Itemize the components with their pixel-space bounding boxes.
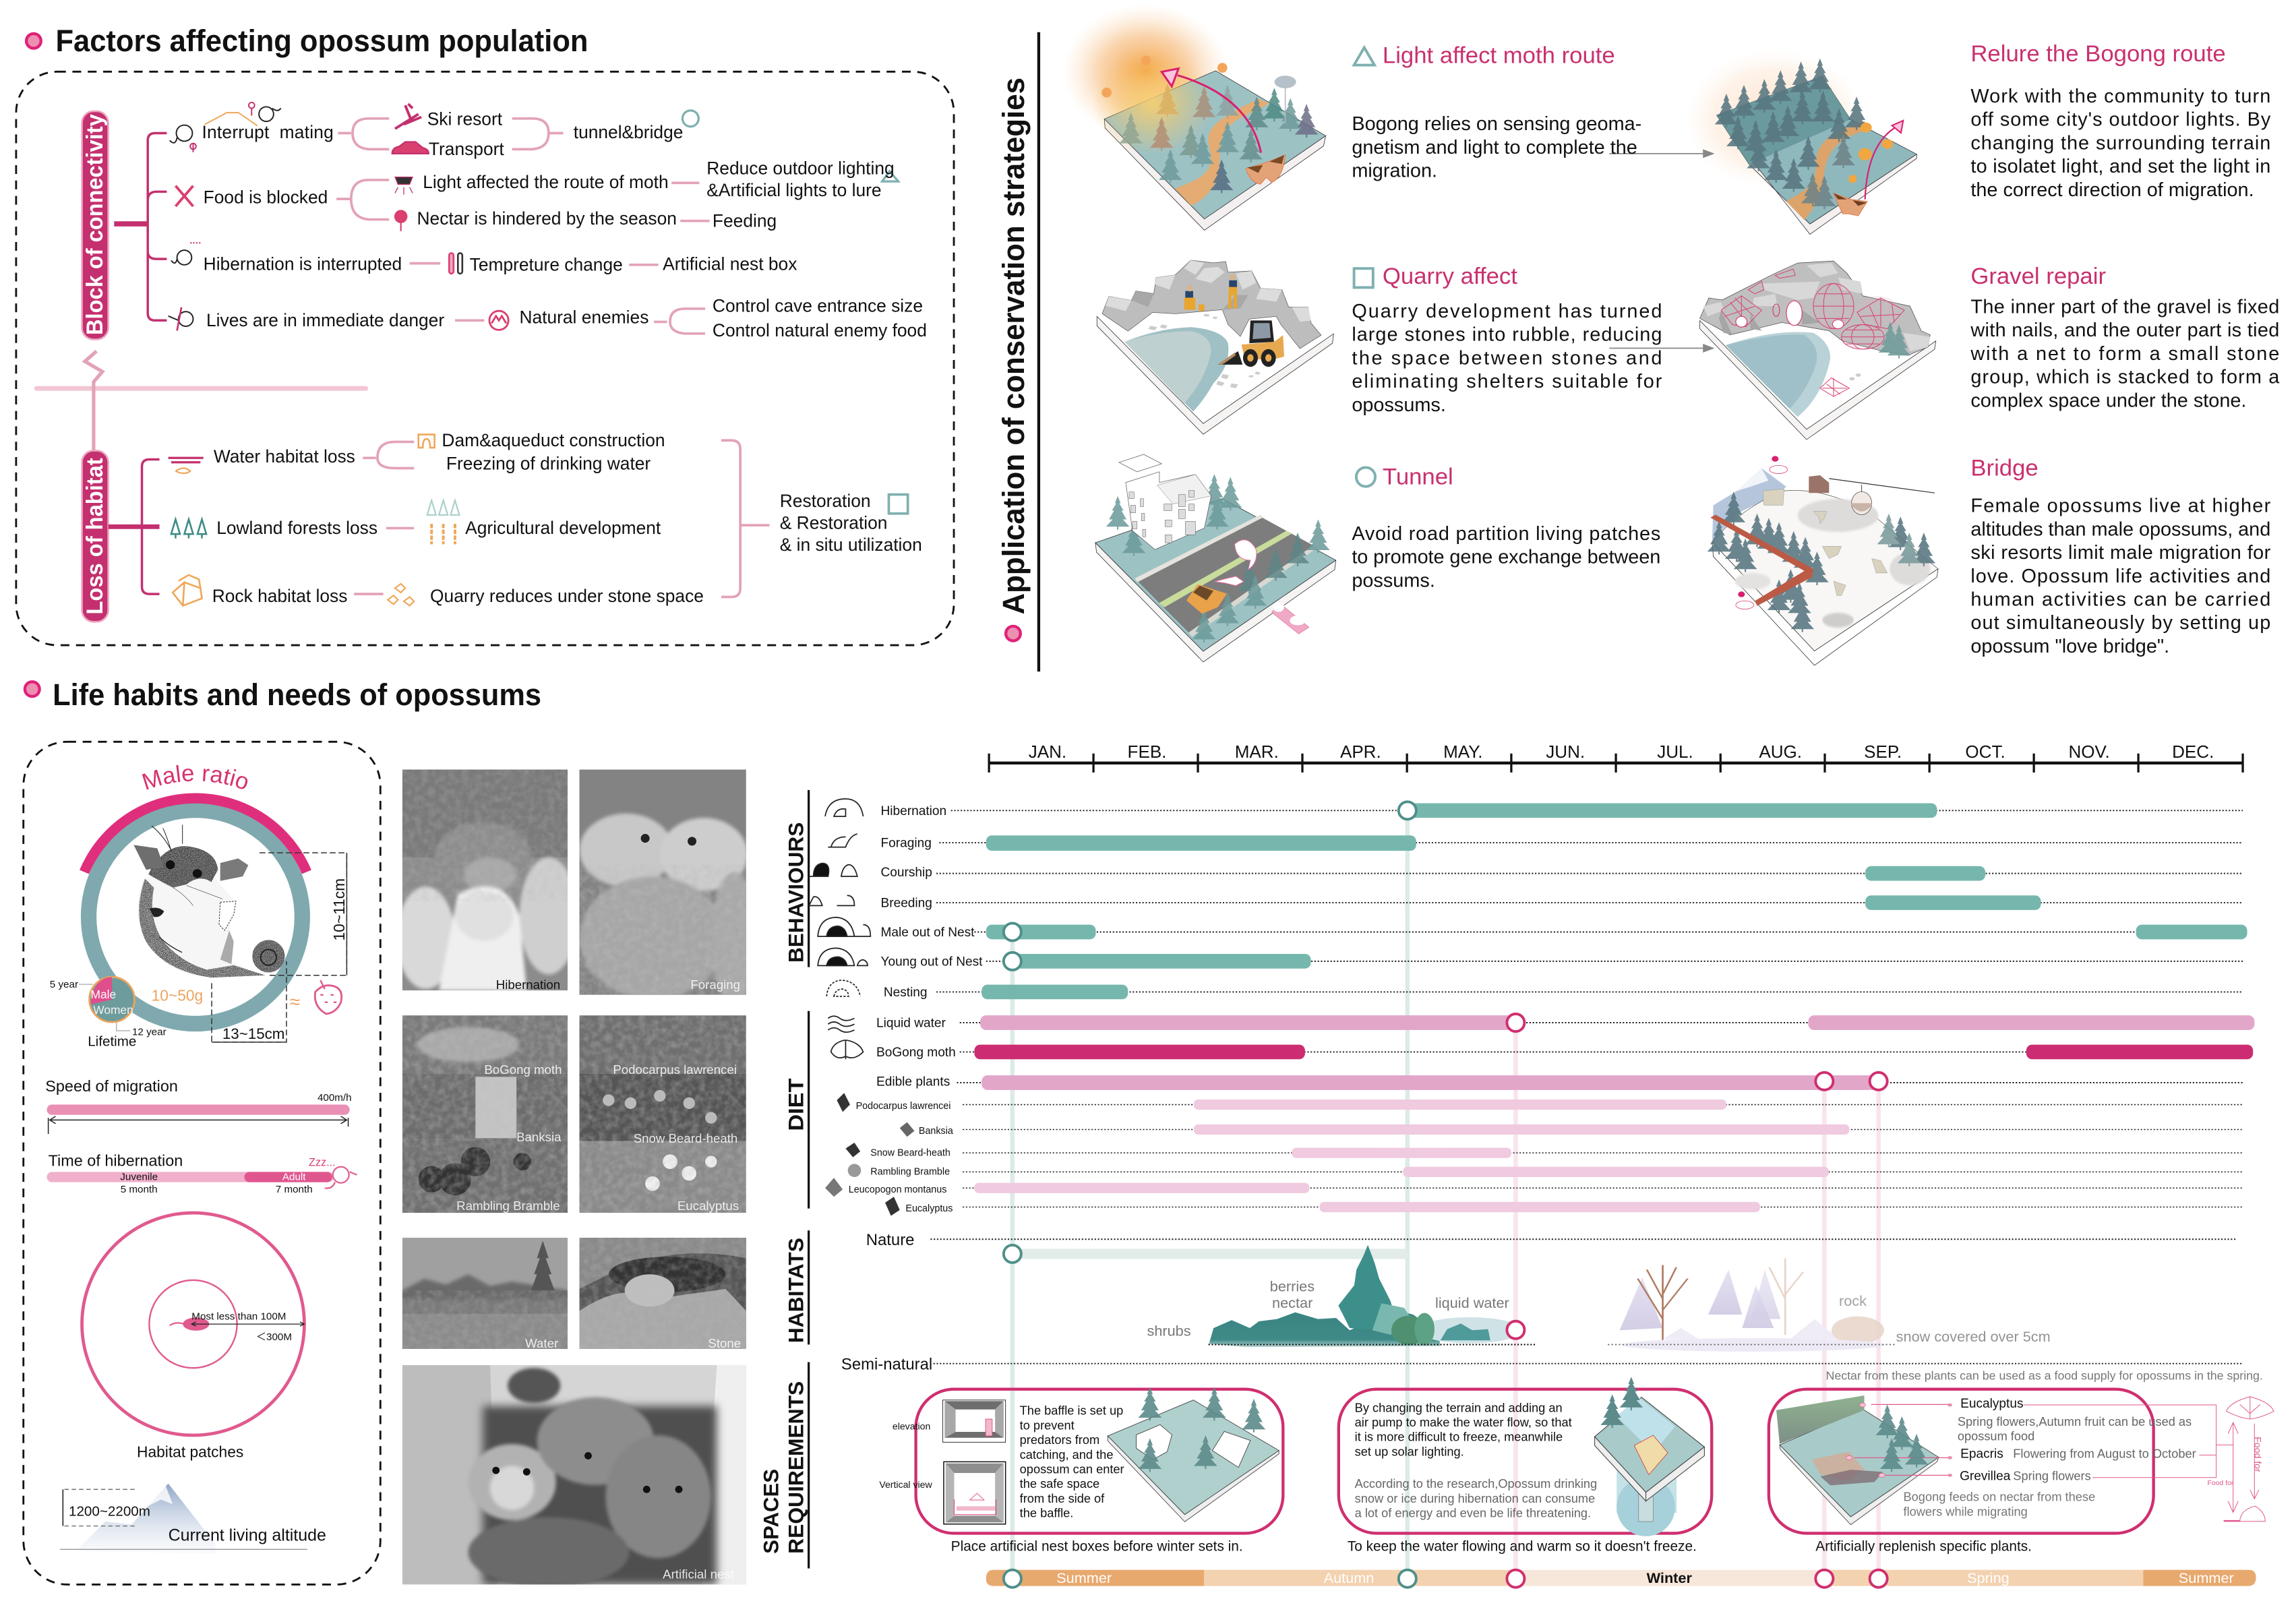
chart: time of hibernation: Time of hibernation [49, 1152, 183, 1170]
axis: months: DEC. [2172, 742, 2214, 762]
row labels: behaviours and diet: Banksia [919, 1126, 953, 1137]
text block: quarry affect: Quarry affect [1383, 264, 1517, 289]
text block: light affect moth route: migration. [1352, 160, 1437, 182]
chart: time of hibernation: 7 month [276, 1184, 313, 1195]
text block: bridge: opossum "love bridge". [1970, 636, 2169, 657]
diagram: moth feeds possum food chain: Food for [2208, 1480, 2234, 1487]
axis: months: JUL. [1657, 742, 1693, 762]
text block: tunnel: to promote gene exchange between [1352, 547, 1660, 568]
vertical rule [1037, 32, 1040, 671]
text block: bridge: altitudes than male opossums, and [1970, 518, 2270, 540]
photo: plants right column: Podocarpus lawrencei [613, 1062, 737, 1077]
text block: light affect moth route: gnetism and light to complete the [1352, 137, 1637, 158]
panel: replenish plants: flowers while migrating [1904, 1504, 2028, 1518]
text block: tunnel: Avoid road partition living patches [1352, 523, 1660, 545]
axis: months: SEP. [1864, 742, 1902, 762]
note: nectar: Nectar from these plants can be used as a food supply for opossums in the spring. [1826, 1369, 2263, 1383]
chart: speed of migration [45, 1077, 352, 1134]
timeline markers [1004, 802, 1888, 1588]
section: application of conservation strategies [996, 5, 2280, 671]
icon: approx strawberry: ≈ [290, 990, 300, 1012]
icon: rock cubes [173, 575, 202, 605]
panel: artificial nest boxes: the baffle. [1020, 1506, 1073, 1520]
panel: replenish plants: Spring flowers [2013, 1469, 2091, 1483]
illustration: natural habitat vegetation: liquid water [1435, 1294, 1509, 1311]
row labels: behaviours and diet: Leucopogon montanus [849, 1184, 946, 1195]
chart: diet [974, 1015, 2254, 1212]
panel: replenish plants: Bogong feeds on nectar from these [1904, 1490, 2095, 1504]
captions [951, 1538, 2032, 1554]
text block: light affect moth route [1352, 42, 1641, 182]
text block: tunnel: possums. [1352, 570, 1435, 591]
panel: replenish plants: opossum food [1958, 1429, 2034, 1443]
panel: artificial nest boxes: the safe space [1020, 1476, 1099, 1491]
factor labels: Freezing of drinking water [446, 454, 651, 474]
group labels: SPACES [760, 1469, 783, 1554]
factor labels: Quarry reduces under stone space [430, 586, 704, 606]
factor labels: Transport [429, 139, 504, 159]
panel: artificial nest boxes: from the side of [1020, 1491, 1105, 1505]
pill: block of connectivity: Block of connectivity [82, 114, 108, 335]
illustration: snow-covered forest: snow covered over 5cm [1896, 1328, 2051, 1345]
group labels: HABITATS [784, 1238, 808, 1343]
panel: artificial nest boxes: to prevent [1020, 1418, 1075, 1432]
chart: season bar [986, 1569, 2256, 1586]
icon: predator cat [489, 311, 508, 330]
illustration: opossum [133, 824, 284, 978]
group labels: BEHAVIOURS [784, 822, 808, 963]
illustration: tunnel road [1095, 454, 1336, 662]
panel: keep water flowing: air pump to make the water flow, so that [1355, 1415, 1572, 1429]
diagram: moth feeds possum food chain [2208, 1397, 2274, 1522]
photo: stone: Stone [708, 1336, 741, 1350]
chart: behaviours [982, 803, 2247, 999]
dimension: body height: 10~11cm [330, 878, 348, 940]
illustration: natural habitat vegetation [1147, 1245, 1536, 1347]
icon: thermometer [449, 253, 462, 274]
chart: lifetime pie: 5 year [50, 979, 78, 990]
icons: behaviour rows [809, 799, 870, 1059]
illustration: altitude mountain [60, 1484, 326, 1554]
photo: plants left column: BoGong moth [484, 1062, 562, 1077]
icons: plant species [825, 1093, 914, 1215]
panel: artificial nest boxes: elevation [893, 1420, 930, 1431]
panel: keep water flowing: snow or ice during hibernation can consume [1355, 1491, 1595, 1505]
icon: dam [419, 435, 435, 448]
section: life habits and needs [22, 678, 746, 1586]
panel: artificial nest boxes: Vertical view [879, 1479, 932, 1490]
icon: car [392, 142, 429, 154]
section heading marker [25, 682, 40, 696]
arrow: light to relure [1609, 149, 1715, 158]
row labels: behaviours and diet: BoGong moth [876, 1046, 956, 1060]
factor labels: tunnel&bridge [574, 122, 683, 142]
chart: lifetime pie: Women [93, 1003, 133, 1017]
photo: water [402, 1238, 568, 1350]
chart: season bar: Spring [1967, 1569, 2010, 1586]
axis: months: MAR. [1235, 742, 1279, 762]
connector between groups [36, 351, 366, 454]
panel: replenish plants [1769, 1389, 2233, 1533]
text block: bridge: love. Opossum life activities and [1970, 566, 2270, 587]
icon: farmland [427, 500, 459, 544]
factor labels: Food is blocked [204, 187, 328, 208]
factor labels [202, 109, 927, 606]
axis: months: APR. [1340, 742, 1381, 762]
row labels: behaviours and diet: Courship [881, 866, 932, 880]
text block: relure the bogong route: the correct direction of migration. [1970, 179, 2254, 201]
chart: habitat patches [82, 1213, 304, 1461]
group labels: DIET [784, 1078, 808, 1131]
text block: bridge: ski resorts limit male migration for [1970, 542, 2271, 564]
branch: connectivity tree [114, 133, 167, 320]
text block: quarry affect: the space between stones and [1352, 347, 1662, 369]
panel: keep water flowing: a lot of energy and even be life threatening. [1355, 1506, 1591, 1520]
title: factors: Factors affecting opossum population [55, 24, 588, 58]
panel: replenish plants: Spring flowers,Autumn fruit can be used as [1958, 1414, 2192, 1428]
chart: habitat patches: Most less than 100M [191, 1311, 286, 1323]
chart: lifetime pie: Lifetime [88, 1034, 136, 1050]
illustration: relure the bogong route [1685, 49, 1916, 235]
factor labels: Lives are in immediate danger [206, 310, 444, 330]
panel: replenish plants: Eucalyptus [1960, 1397, 2023, 1411]
photo: plants right column: Eucalyptus [677, 1199, 739, 1213]
row labels: behaviours and diet: Foraging [881, 837, 932, 851]
row labels: behaviours and diet: Eucalyptus [905, 1203, 953, 1214]
chart: season bar: Summer [1056, 1569, 1112, 1586]
text block: bridge: Bridge [1970, 455, 2039, 481]
chart: lifetime pie: Male [91, 988, 116, 1001]
illustration: altitude mountain: 1200~2200m [69, 1503, 150, 1519]
factor labels: Artificial nest box [663, 253, 797, 274]
illustration: natural habitat vegetation: shrubs [1147, 1322, 1191, 1339]
chart: season bar: Autumn [1324, 1569, 1374, 1586]
trees on gravel scene [1879, 322, 1910, 359]
panel: artificial nest boxes: catching, and the [1020, 1447, 1113, 1462]
row labels: behaviours and diet: Hibernation [881, 804, 946, 818]
chart: time of hibernation: Juvenile [120, 1171, 158, 1182]
diagram: moth feeds possum food chain: Food for [2252, 1437, 2263, 1472]
illustration: altitude mountain: Current living altitude [169, 1526, 326, 1544]
weight label: 10~50g [152, 986, 203, 1004]
guide lines and connector bands [1013, 810, 1879, 1579]
dimension: body height [260, 853, 348, 975]
row labels: behaviours and diet: Young out of Nest [881, 955, 983, 969]
row labels: behaviours and diet: Liquid water [876, 1017, 946, 1031]
captions: Place artificial nest boxes before winter sets in. [951, 1538, 1243, 1554]
photo: water: Water [525, 1336, 558, 1350]
text block: gravel repair: with nails, and the outer part is tied [1970, 320, 2279, 341]
axis: months: OCT. [1965, 742, 2005, 762]
axis: months: NOV. [2069, 742, 2110, 762]
row labels: behaviours and diet: Breeding [881, 897, 932, 911]
text block: gravel repair: group, which is stacked to form a [1970, 367, 2280, 388]
icon: fork and knife [175, 186, 193, 206]
pill: loss of habitat: Loss of habitat [82, 458, 108, 615]
panel: keep water flowing: By changing the terrain and adding an [1355, 1400, 1563, 1414]
text block: bridge: human activities can be carried [1970, 589, 2270, 610]
text block: relure the bogong route: changing the surrounding terrain [1970, 132, 2270, 154]
habitat labels: Nature [866, 1231, 914, 1249]
row labels: behaviours and diet: Nesting [884, 986, 928, 1000]
row labels: behaviours and diet [849, 804, 983, 1214]
factor labels: Nectar is hindered by the season [417, 208, 677, 229]
panel: artificial nest boxes: opossum can enter [1020, 1462, 1124, 1476]
text block: relure the bogong route: Work with the community to turn [1970, 86, 2270, 107]
section: annual timeline chart [760, 742, 2274, 1588]
axis: months: JAN. [1029, 742, 1066, 762]
text block: bridge: out simultaneously by setting up [1970, 612, 2270, 634]
text block: gravel repair [1970, 264, 2280, 411]
icon: opossum mating [170, 102, 281, 152]
factor labels: Control natural enemy food [713, 320, 927, 340]
text block: relure the bogong route [1970, 41, 2271, 201]
row labels: behaviours and diet: Male out of Nest [881, 926, 975, 940]
chart: habitat patches: Habitat patches [137, 1443, 243, 1461]
panel: replenish plants: Flowering from August to October [2013, 1447, 2196, 1461]
icon: restoration square [888, 495, 908, 514]
axis: months: JUN. [1546, 742, 1585, 762]
text block: relure the bogong route: off some city's outdoor lights. By [1970, 109, 2271, 131]
title: life habits: Life habits and needs of opossums [53, 678, 541, 712]
text block: gravel repair: with a net to form a small stone [1970, 343, 2279, 365]
chart: season bar: Summer [2179, 1569, 2234, 1586]
icon: water and fish [169, 458, 204, 473]
factor labels: & Restoration [780, 513, 887, 533]
panel: opossum profile dashed frame [24, 742, 380, 1584]
factor labels: Tempreture change [470, 255, 623, 275]
section: factors affecting opossum population [16, 24, 954, 645]
illustration: love bridge ski resort [1708, 456, 1938, 665]
axis: months: MAY. [1443, 742, 1482, 762]
text block: light affect moth route: Bogong relies on sensing geoma- [1352, 113, 1641, 135]
row labels: behaviours and diet: Rambling Bramble [870, 1167, 950, 1178]
factor labels: Ski resort [427, 109, 503, 129]
icon: lowland trees [171, 519, 206, 539]
text block: quarry affect: large stones into rubble, reducing [1352, 324, 1662, 346]
habitat labels: Semi-natural [841, 1355, 932, 1373]
panel: factors dashed frame [16, 71, 954, 645]
photo: foraging [579, 770, 746, 995]
panel: artificial nest boxes: predators from [1020, 1433, 1099, 1447]
text block: gravel repair: The inner part of the gravel is fixed [1970, 296, 2279, 318]
arrow: quarry to gravel [1609, 344, 1715, 353]
text block: relure the bogong route: to isolatet light, and set the light in [1970, 156, 2270, 177]
row labels: behaviours and diet: Edible plants [876, 1075, 950, 1089]
pink connector brackets [336, 119, 770, 597]
photo: plants left column: Banksia [516, 1130, 562, 1144]
illustration: snow-covered forest: rock [1839, 1292, 1867, 1309]
axis: months: AUG. [1759, 742, 1802, 762]
icon: lamp [395, 177, 413, 195]
factor labels: Light affected the route of moth [423, 172, 669, 192]
illustration: snow-covered forest [1608, 1259, 2051, 1352]
panel: keep water flowing [1339, 1377, 1712, 1536]
icon: hibernating opossum [171, 243, 200, 265]
factor labels: Control cave entrance size [713, 295, 923, 315]
chart: time of hibernation: Adult [282, 1171, 306, 1182]
chart: habitat patches: ＜300M [256, 1331, 292, 1343]
chart: time of hibernation: 5 month [121, 1184, 158, 1195]
factor labels: Restoration [780, 491, 871, 511]
chart: male ratio ring [80, 764, 311, 1031]
dimension: body width: 13~15cm [222, 1025, 284, 1042]
group labels [760, 790, 810, 1569]
factor labels: Feeding [713, 210, 777, 231]
row labels: behaviours and diet: Podocarpus lawrencei [856, 1101, 950, 1112]
text block: quarry affect: opossums. [1352, 394, 1446, 416]
photo: artificial nest: Artificial nest [663, 1567, 735, 1582]
illustration: gravel repair [1700, 261, 1936, 440]
text block: tunnel: Tunnel [1383, 464, 1453, 489]
panel: keep water flowing: According to the research,Opossum drinking [1355, 1476, 1597, 1491]
chart: season bar: Winter [1647, 1569, 1692, 1586]
photo: stone [580, 1238, 746, 1350]
axis: months: FEB. [1128, 742, 1166, 762]
text block: bridge: Female opossums live at higher [1970, 495, 2271, 517]
axis: months [989, 742, 2243, 773]
chart: time of hibernation: Zzz... [309, 1157, 336, 1169]
factor labels: Rock habitat loss [212, 586, 347, 606]
branch: habitat tree [109, 459, 160, 594]
text block: gravel repair: Gravel repair [1970, 264, 2106, 289]
photo: plants left column [402, 1015, 568, 1213]
factor labels: Reduce outdoor lighting [706, 158, 895, 178]
captions: Artificially replenish specific plants. [1815, 1538, 2032, 1554]
chart: speed of migration: Speed of migration [45, 1077, 178, 1095]
photo: hibernation: Hibernation [496, 978, 560, 992]
chart: lifetime pie: 12 year [132, 1026, 167, 1037]
factor labels: &Artificial lights to lure [706, 180, 882, 200]
title: conservation strategies: Application of conservation strategies [996, 78, 1031, 615]
group labels: REQUIREMENTS [784, 1381, 808, 1554]
text block: quarry affect [1352, 264, 1662, 416]
panel: keep water flowing: set up solar lighting. [1355, 1444, 1464, 1458]
text block: bridge [1970, 455, 2271, 657]
icon: opossum in danger [169, 307, 193, 330]
text block: light affect moth route: Light affect moth route [1383, 42, 1615, 68]
chart: speed of migration: 400m/h [318, 1092, 352, 1104]
factor labels: & in situ utilization [780, 535, 922, 555]
illustration: natural habitat vegetation: berries [1270, 1277, 1315, 1294]
factor labels: Dam&aqueduct construction [442, 430, 665, 450]
chart: time of hibernation [47, 1152, 357, 1195]
factor labels: Water habitat loss [214, 446, 355, 467]
illustration: quarry affect [1097, 260, 1333, 434]
factor labels: Interrupt mating [202, 122, 334, 142]
habitat labels [841, 1231, 932, 1373]
text block: quarry affect: eliminating shelters suitable for [1352, 371, 1662, 392]
icon: triangle symbol [882, 171, 899, 181]
dimension: body width [212, 961, 286, 1042]
illustration: light affect moth route [1063, 5, 1326, 231]
icon: circle tunnel symbol [682, 111, 698, 127]
factor labels: Natural enemies [519, 307, 648, 328]
photo: plants right column: Snow Beard-heath [634, 1131, 737, 1145]
photo: plants left column: Rambling Bramble [456, 1199, 560, 1213]
factor labels: Lowland forests loss [216, 518, 378, 538]
dotted row lines [930, 810, 2243, 1364]
icon: approx strawberry [290, 980, 342, 1014]
icon: skier [395, 104, 421, 129]
text block: tunnel [1352, 464, 1660, 591]
photo: foraging: Foraging [690, 978, 740, 992]
row labels: behaviours and diet: Snow Beard-heath [870, 1148, 950, 1159]
text block: relure the bogong route: Relure the Bogong route [1970, 41, 2226, 67]
section heading marker [26, 34, 41, 49]
panel: replenish plants: Epacris [1960, 1447, 2003, 1462]
chart: male ratio ring: Male ratio [142, 764, 248, 790]
panel: replenish plants: Grevillea [1960, 1470, 2011, 1484]
panel: keep water flowing: it is more difficult to freeze, meanwhile [1355, 1430, 1563, 1444]
photo: artificial nest [402, 1365, 746, 1584]
factor labels: Hibernation is interrupted [204, 253, 402, 274]
photo: plants right column [580, 1015, 746, 1213]
text block: gravel repair: complex space under the stone. [1970, 390, 2246, 411]
captions: To keep the water flowing and warm so it doesn't freeze. [1348, 1538, 1697, 1554]
chart: lifetime pie [50, 977, 167, 1050]
illustration: natural habitat vegetation: nectar [1272, 1294, 1312, 1311]
photo: hibernation [402, 770, 568, 992]
panel: artificial nest boxes [879, 1387, 1283, 1533]
icon: quarry stones [388, 584, 414, 605]
section heading marker [1006, 626, 1021, 641]
icon: flower [394, 210, 407, 231]
panel: artificial nest boxes: The baffle is set up [1020, 1404, 1123, 1418]
factor labels: Agricultural development [465, 518, 661, 538]
text block: quarry affect: Quarry development has turned [1352, 301, 1662, 322]
